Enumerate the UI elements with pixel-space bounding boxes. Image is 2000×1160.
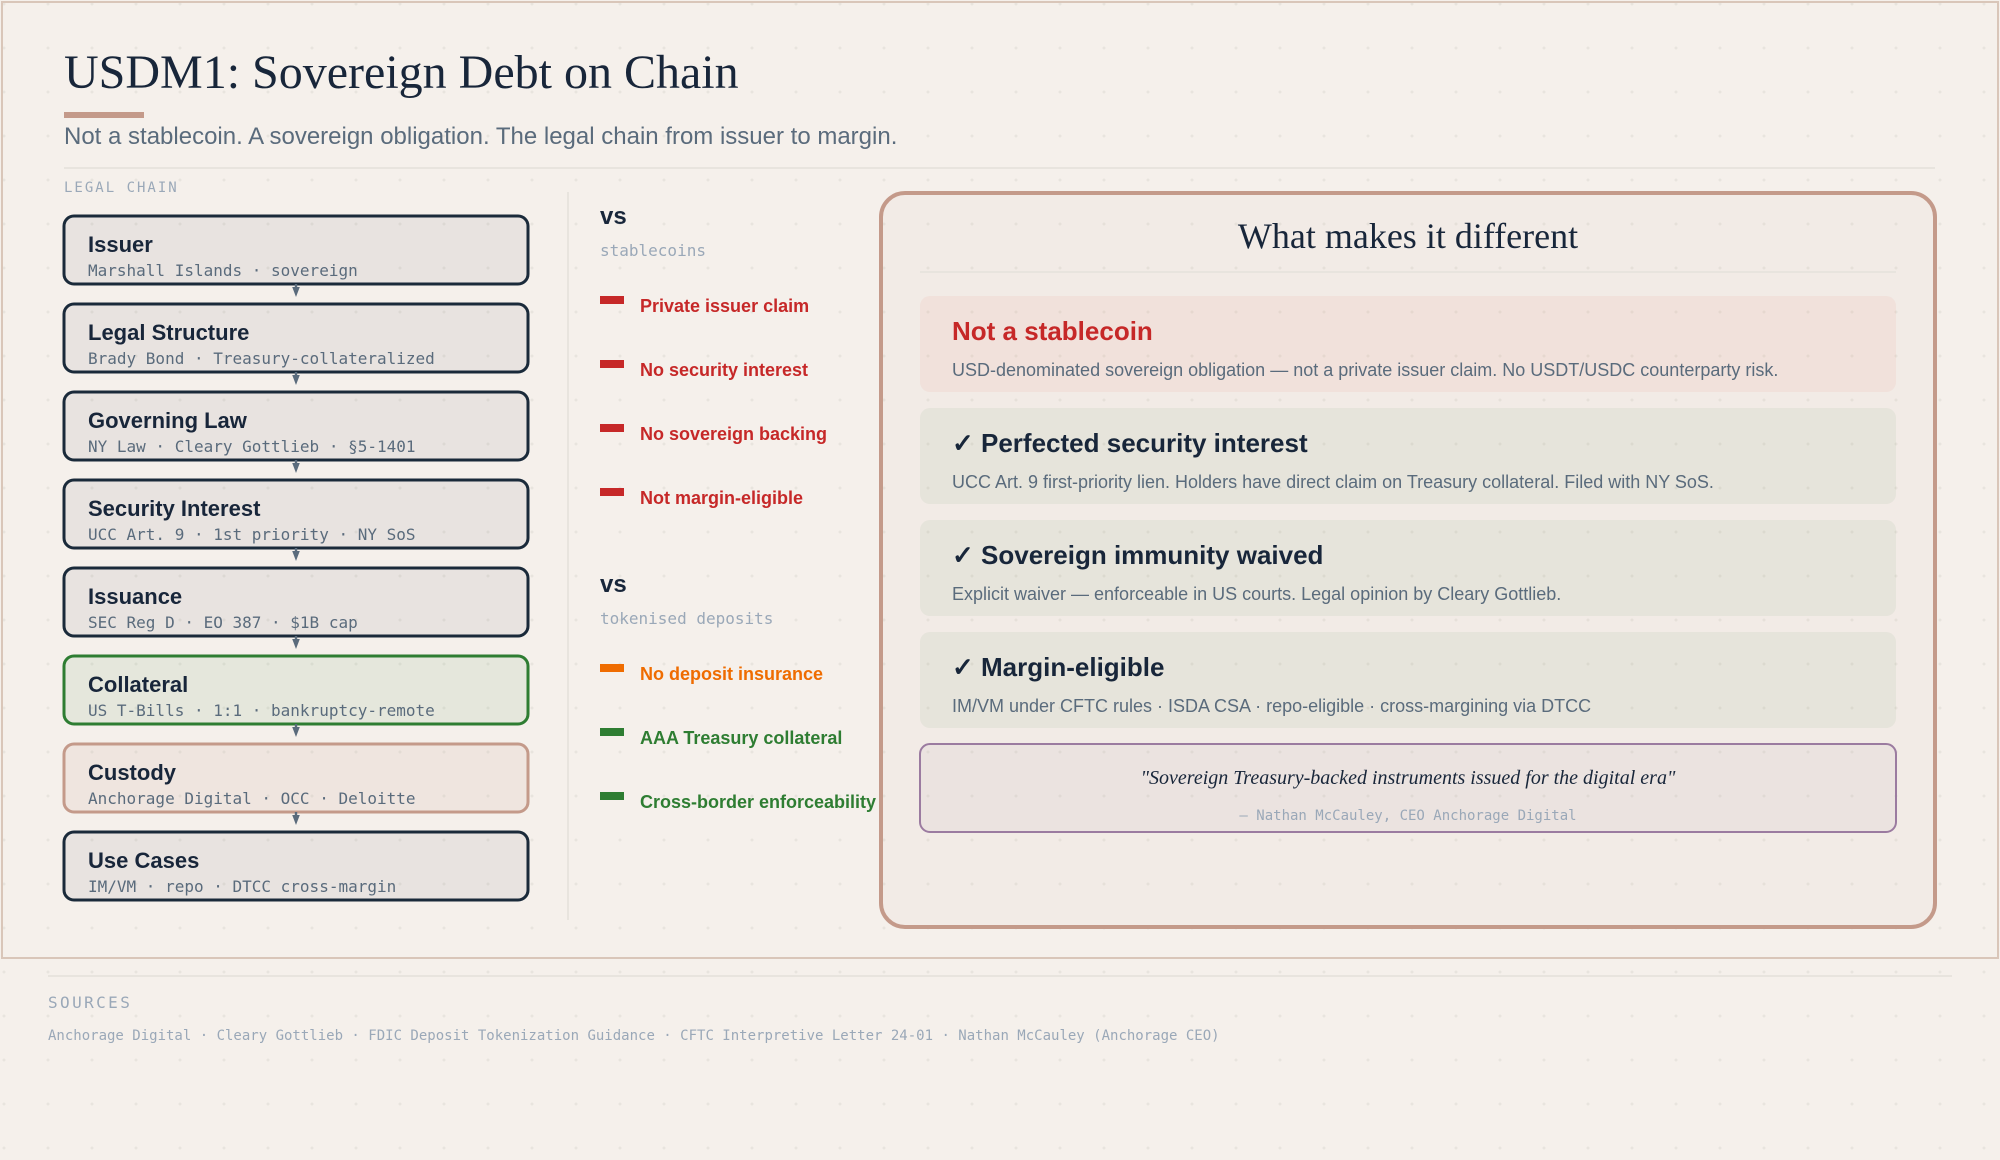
chain step: use cases xyxy=(64,832,528,900)
chain step: legal structure: Brady Bond · Treasury-collateralized xyxy=(88,349,435,368)
chain step: issuance: SEC Reg D · EO 387 · $1B cap xyxy=(88,613,358,632)
sources list: Anchorage Digital · Cleary Gottlieb · FDIC Deposit Tokenization Guidance · CFTC Interpretive Letter 24-01 · Nathan McCauley (Anchorage CEO) xyxy=(48,1028,1220,1044)
chain step: legal structure: Legal Structure xyxy=(88,320,249,345)
callout: quote: — Nathan McCauley, CEO Anchorage Digital xyxy=(1239,808,1577,824)
arrow xyxy=(292,636,300,649)
chain step: governing law: Governing Law xyxy=(88,408,248,433)
chain step: issuer: Issuer xyxy=(88,232,153,257)
section label: legal chain: LEGAL CHAIN xyxy=(64,180,179,196)
item: AAA treasury collateral: AAA Treasury collateral xyxy=(640,728,842,748)
chain step: use cases: IM/VM · repo · DTCC cross-margin xyxy=(88,877,396,896)
chain step: collateral xyxy=(64,656,528,724)
card: not a stablecoin xyxy=(920,296,1896,392)
card: not a stablecoin: Not a stablecoin xyxy=(952,316,1153,346)
card: not a stablecoin: USD-denominated sovereign obligation — not a private issuer claim. No USDT/USDC counterparty risk. xyxy=(952,360,1778,380)
chain step: collateral: Collateral xyxy=(88,672,188,697)
item: no security interest: No security interest xyxy=(640,360,808,380)
chain step: legal structure xyxy=(64,304,528,372)
footer: sources xyxy=(48,993,1220,1044)
card: sovereign immunity waived: ✓ Sovereign immunity waived xyxy=(952,540,1323,570)
subheading: stablecoins: stablecoins xyxy=(600,241,706,260)
card: margin-eligible: ✓ Margin-eligible xyxy=(952,652,1164,682)
panel: what makes it different xyxy=(881,193,1935,927)
arrow xyxy=(292,724,300,737)
chain step: custody: Anchorage Digital · OCC · Deloitte xyxy=(88,789,416,808)
chain step: governing law: NY Law · Cleary Gottlieb · §5-1401 xyxy=(88,437,416,456)
card: sovereign immunity waived: Explicit waiver — enforceable in US courts. Legal opinion by Cleary Gottlieb. xyxy=(952,584,1561,604)
arrow xyxy=(292,460,300,473)
item: no deposit insurance: No deposit insurance xyxy=(640,664,823,684)
chain step: issuer: Marshall Islands · sovereign xyxy=(88,261,358,280)
chain step: issuance: Issuance xyxy=(88,584,182,609)
card: sovereign immunity waived xyxy=(920,520,1896,616)
card: perfected security interest xyxy=(920,408,1896,504)
chain step: collateral: US T-Bills · 1:1 · bankruptcy-remote xyxy=(88,701,435,720)
card: margin-eligible xyxy=(920,632,1896,728)
comparison: vs stablecoins xyxy=(600,203,827,508)
sources heading: SOURCES xyxy=(48,993,132,1012)
chain step: custody: Custody xyxy=(88,760,177,785)
chain step: use cases: Use Cases xyxy=(88,848,199,873)
card: perfected security interest: UCC Art. 9 first-priority lien. Holders have direct claim on Treasury collateral. Filed with NY SoS. xyxy=(952,472,1714,492)
title: USDM1: Sovereign Debt on Chain xyxy=(64,46,739,99)
arrow xyxy=(292,812,300,825)
subtitle: Not a stablecoin. A sovereign obligation. The legal chain from issuer to margin. xyxy=(64,123,897,150)
chain step: issuer xyxy=(64,216,528,284)
arrow xyxy=(292,284,300,297)
chain step: issuance xyxy=(64,568,528,636)
panel heading: What makes it different xyxy=(1238,216,1578,256)
chain step: custody xyxy=(64,744,528,812)
card: perfected security interest: ✓ Perfected security interest xyxy=(952,428,1308,458)
arrow xyxy=(292,548,300,561)
heading: vs: vs xyxy=(600,571,627,598)
item: no sovereign backing: No sovereign backing xyxy=(640,424,827,444)
comparison: vs tokenised deposits xyxy=(600,571,876,812)
callout: quote xyxy=(920,744,1896,832)
panel: legal chain xyxy=(64,216,528,900)
chain step: governing law xyxy=(64,392,528,460)
chain step: security interest: Security Interest xyxy=(88,496,261,521)
subheading: tokenised deposits: tokenised deposits xyxy=(600,609,773,628)
item: private issuer claim: Private issuer claim xyxy=(640,296,809,316)
heading: vs: vs xyxy=(600,203,627,230)
title accent bar xyxy=(64,112,144,118)
chain step: security interest xyxy=(64,480,528,548)
arrow xyxy=(292,372,300,385)
chain step: security interest: UCC Art. 9 · 1st priority · NY SoS xyxy=(88,525,416,544)
item: not margin-eligible: Not margin-eligible xyxy=(640,488,803,508)
callout: quote: "Sovereign Treasury-backed instruments issued for the digital era" xyxy=(1141,767,1676,789)
card: margin-eligible: IM/VM under CFTC rules · ISDA CSA · repo-eligible · cross-margining via DTCC xyxy=(952,696,1591,716)
item: cross-border enforceability: Cross-border enforceability xyxy=(640,792,876,812)
